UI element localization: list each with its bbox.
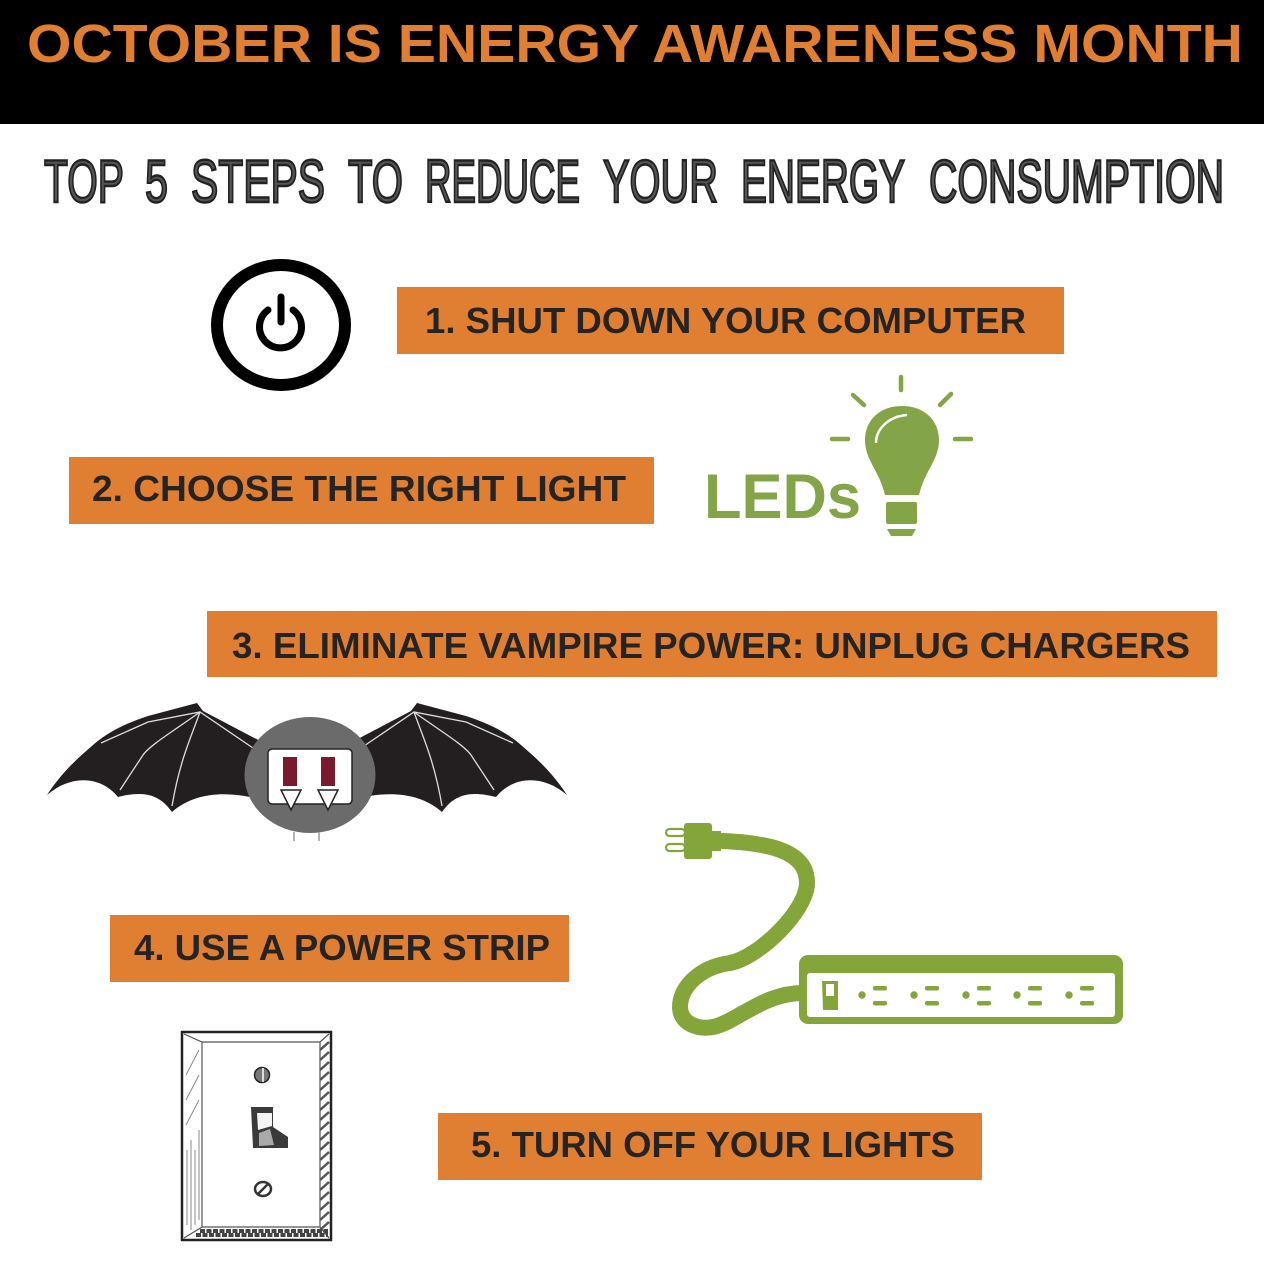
step 4 label: 4. USE A POWER STRIP — [134, 927, 550, 968]
head — [244, 717, 376, 833]
step 2 label — [69, 457, 654, 524]
subtitle: 5 — [145, 148, 168, 215]
title banner: OCTOBER IS ENERGY AWARENESS MONTH — [27, 14, 1243, 74]
fangs — [281, 790, 338, 810]
icon: LED light bulb — [704, 377, 971, 536]
subtitle: STEPS — [191, 148, 325, 215]
step 2 label: 2. CHOOSE THE RIGHT LIGHT — [92, 468, 626, 509]
step 3 label — [207, 611, 1217, 677]
left wing — [47, 703, 262, 812]
icon: LED light bulb: LEDs — [704, 462, 861, 532]
icon: light switch — [182, 1032, 331, 1240]
right wing — [352, 703, 567, 812]
subtitle: YOUR — [603, 148, 718, 215]
subtitle: REDUCE — [425, 148, 580, 215]
subtitle — [44, 148, 1224, 215]
icon: vampire bat outlet — [47, 703, 567, 841]
subtitle: TO — [348, 148, 403, 215]
step 5 label — [438, 1113, 982, 1180]
outlet face — [268, 749, 352, 804]
step 3 label: 3. ELIMINATE VAMPIRE POWER: UNPLUG CHARGERS — [232, 625, 1190, 666]
title banner — [0, 0, 1264, 124]
step 4 label — [110, 915, 569, 982]
step 5 label: 5. TURN OFF YOUR LIGHTS — [471, 1124, 955, 1165]
subtitle: TOP — [44, 148, 124, 215]
step 1 label — [397, 287, 1064, 354]
step 1 label: 1. SHUT DOWN YOUR COMPUTER — [425, 300, 1026, 341]
icon: power strip — [666, 823, 1123, 1028]
subtitle: ENERGY — [741, 148, 905, 215]
icon: power button — [217, 265, 345, 385]
